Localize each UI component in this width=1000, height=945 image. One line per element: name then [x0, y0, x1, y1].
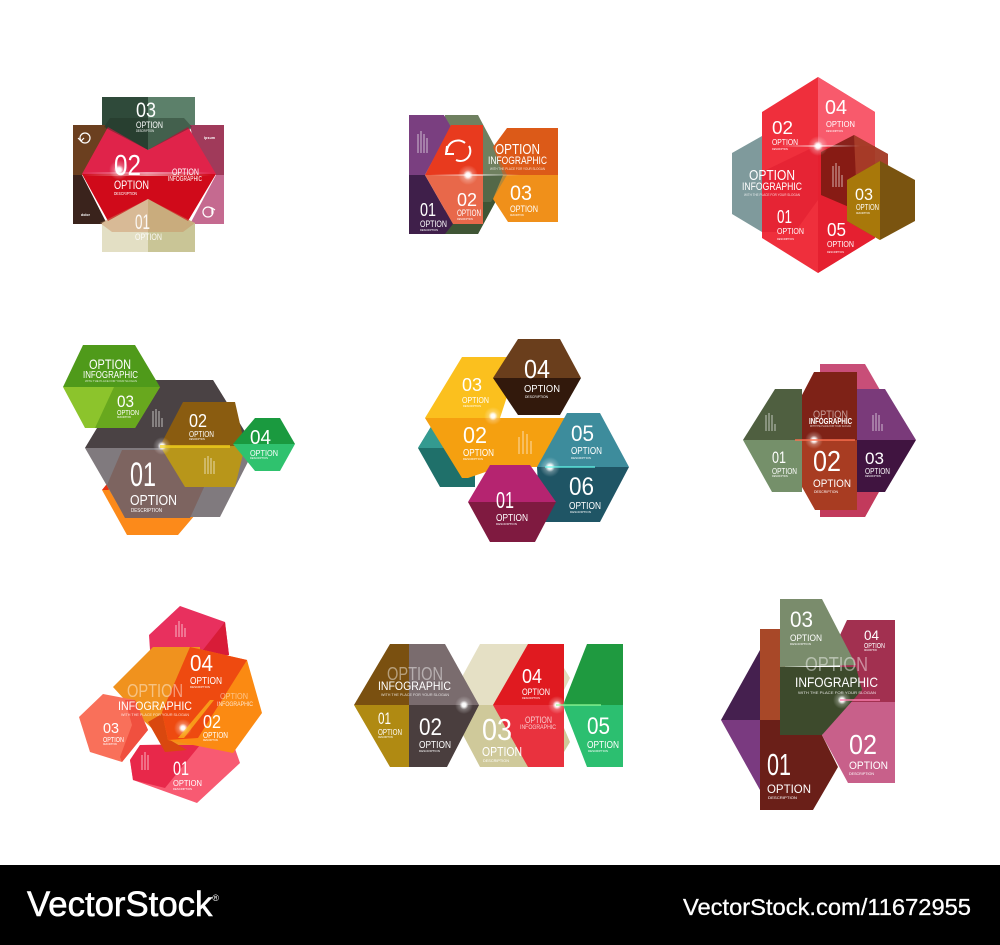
- option 03: [136, 99, 163, 133]
- option 01: OPTION: [772, 467, 797, 476]
- panel: infographic 9: [721, 599, 895, 810]
- option 03: [482, 712, 522, 763]
- option 02: DESCRIPTION: [463, 457, 483, 461]
- glow: [808, 136, 828, 156]
- option 04: DESCRIPTION: [525, 395, 548, 399]
- option 04: 04: [522, 666, 542, 688]
- option infographic small: [520, 715, 556, 731]
- labels: Ipsum: [204, 136, 215, 140]
- option 03: DESCRIPTION: [483, 759, 510, 763]
- option 04: OPTION: [826, 119, 855, 129]
- option 01: OPTION: [378, 728, 402, 737]
- option 02: 02: [813, 446, 841, 478]
- option 01: OPTION: [173, 778, 202, 788]
- option 03: [790, 607, 822, 646]
- option 04: [190, 650, 222, 689]
- option 04: DESCRIPTION: [250, 456, 268, 460]
- image url: VectorStock.com/11672955: [683, 894, 971, 920]
- option infographic: [168, 167, 202, 183]
- option 03: 03: [855, 185, 873, 204]
- option 04: 04: [864, 627, 879, 643]
- bars icons: [766, 413, 882, 431]
- option 06: 06: [569, 473, 594, 501]
- option infographic: WITH THE PLACE FOR YOUR SLOGAN: [490, 167, 545, 171]
- option 02: [114, 150, 149, 196]
- option 02: [463, 422, 494, 461]
- option 01: DESCRIPTION: [772, 475, 788, 478]
- option 02: OPTION: [419, 740, 451, 751]
- option infographic small: [217, 692, 253, 708]
- option 03: OPTION: [117, 408, 139, 417]
- option 04: OPTION: [522, 687, 550, 697]
- panel: infographic 1: [73, 97, 224, 252]
- option infographic small: INFOGRAPHIC: [217, 701, 253, 708]
- option 03: 03: [117, 392, 134, 411]
- option infographic: INFOGRAPHIC: [795, 674, 878, 690]
- bars icons: [153, 409, 214, 474]
- option 05: [571, 421, 602, 460]
- option 02: DESCRIPTION: [114, 191, 137, 196]
- option 02: OPTION: [463, 448, 494, 459]
- option 04: OPTION: [864, 643, 885, 650]
- option 02: 02: [419, 714, 442, 741]
- option 02: 02: [114, 150, 141, 182]
- option 02: OPTION: [813, 478, 851, 490]
- glow: [458, 165, 478, 185]
- option 04: [524, 354, 560, 399]
- option 02: [813, 446, 851, 494]
- brand name: ®: [212, 893, 219, 903]
- option 01: DESCRIPTION: [496, 522, 517, 526]
- option infographic: WITH THE PLACE FOR YOUR SLOGAN: [381, 693, 449, 697]
- option 03: OPTION: [103, 737, 124, 744]
- option 03: [117, 392, 139, 419]
- option 03: 03: [790, 607, 813, 632]
- option infographic small: INFOGRAPHIC: [520, 724, 556, 731]
- option 06: OPTION: [569, 501, 601, 512]
- glow: [174, 719, 192, 737]
- option infographic: WITH THE PLACE FOR YOUR SLOGAN: [85, 379, 137, 383]
- option 03: 03: [510, 182, 532, 205]
- option 01: 01: [173, 759, 189, 780]
- glows: [484, 407, 502, 425]
- option 03: DESCRIPTION: [790, 642, 811, 646]
- panel: infographic 6: [743, 364, 916, 517]
- option 01: 01: [772, 448, 786, 467]
- bars icons: [142, 621, 185, 770]
- option 02: OPTION: [203, 731, 228, 740]
- option 01: [135, 211, 162, 242]
- icon: refresh: [446, 140, 470, 161]
- option 05: OPTION: [571, 446, 602, 457]
- panel: infographic 3: [732, 77, 915, 273]
- option 03: [462, 375, 489, 408]
- icon: refresh right: [203, 207, 215, 217]
- option 03: DESCRIPTION: [136, 129, 154, 133]
- option infographic: OPTION: [89, 356, 131, 372]
- option 02: [772, 118, 798, 151]
- option 02: 02: [189, 411, 207, 431]
- option 01: [772, 448, 797, 478]
- option 05: 05: [587, 713, 610, 740]
- option 03: DESCRIPTION: [856, 211, 870, 215]
- option 01: OPTION: [135, 232, 162, 242]
- option 02: DESCRIPTION: [849, 772, 874, 776]
- option 04: 04: [190, 650, 213, 676]
- brand name: VectorStock: [27, 885, 214, 924]
- option infographic: INFOGRAPHIC: [378, 679, 451, 693]
- option 04: [864, 627, 885, 652]
- option 01: DESCRIPTION: [131, 508, 162, 514]
- option 01: OPTION: [496, 513, 528, 524]
- option 04: OPTION: [190, 676, 222, 687]
- option 05: DESCRIPTION: [588, 749, 608, 753]
- glow: [109, 160, 129, 180]
- option infographic large: OPTION: [127, 681, 183, 701]
- icon: refresh left: [78, 133, 90, 143]
- option 04: OPTION: [524, 384, 560, 395]
- option infographic: OPTION: [749, 167, 795, 184]
- option 03: 03: [865, 449, 884, 468]
- option 04: OPTION: [250, 449, 278, 458]
- option 02: 02: [849, 729, 877, 760]
- labels: [81, 136, 215, 217]
- option infographic: OPTION: [387, 664, 443, 684]
- option 04: DESCRIPTION: [826, 129, 843, 133]
- option 03: 03: [136, 99, 156, 122]
- option infographic: [742, 167, 802, 197]
- option 06: [569, 473, 601, 514]
- option 04: [825, 97, 855, 133]
- option 03: OPTION: [136, 120, 163, 130]
- option 01: 01: [378, 709, 391, 728]
- option infographic: OPTION: [172, 167, 199, 177]
- option 02: 02: [463, 422, 487, 448]
- option 01: 01: [130, 456, 156, 494]
- option 03: DESCRIPTION: [103, 743, 117, 746]
- panel: infographic 2: [409, 115, 558, 234]
- option 03: OPTION: [462, 395, 489, 405]
- option infographic: [378, 664, 451, 697]
- option 01: [767, 747, 811, 800]
- option 01: OPTION: [767, 782, 811, 796]
- option 01: [420, 200, 447, 232]
- option infographic: WITH THE PLACE FOR YOUR SLOGAN: [744, 193, 800, 197]
- glow: [805, 431, 823, 449]
- option 05: OPTION: [827, 239, 854, 249]
- glow: [833, 691, 851, 709]
- glows: [455, 696, 473, 714]
- footer band: [0, 865, 1000, 945]
- option 05: OPTION: [587, 740, 619, 751]
- option 05: DESCRIPTION: [827, 250, 844, 254]
- option infographic: WITH THE PLACE FOR YOUR SLOGAN: [810, 425, 851, 428]
- option 02: OPTION: [457, 208, 481, 218]
- option infographic large: WITH THE PLACE FOR YOUR SLOGAN: [121, 713, 189, 717]
- option 01: 01: [496, 487, 514, 513]
- option infographic: WITH THE PLACE FOR YOUR SLOGAN: [798, 690, 876, 695]
- option 02: OPTION: [189, 430, 214, 439]
- option 03: DESCRIPTION: [865, 475, 881, 478]
- option infographic: INFOGRAPHIC: [83, 370, 138, 381]
- option infographic large: [118, 681, 192, 717]
- option 02: [189, 411, 214, 441]
- option 02: DESCRIPTION: [772, 147, 788, 151]
- option 02: OPTION: [849, 760, 888, 772]
- option 02: [849, 729, 888, 776]
- option 01: [777, 207, 804, 241]
- option infographic: [488, 141, 547, 171]
- option 03: 03: [482, 712, 512, 747]
- option infographic: INFOGRAPHIC: [168, 176, 202, 183]
- option 05: 05: [827, 220, 846, 240]
- option infographic: [795, 654, 878, 695]
- bars icon: [519, 431, 531, 454]
- panel: infographic 4: [63, 345, 295, 535]
- option 02: DESCRIPTION: [419, 749, 440, 753]
- option 01: 01: [420, 200, 436, 220]
- option 01: DESCRIPTION: [420, 228, 438, 232]
- option 02: 02: [457, 190, 477, 210]
- option 03: OPTION: [482, 744, 522, 759]
- option 02: [203, 712, 228, 742]
- option 02: [419, 714, 451, 753]
- option infographic: [83, 356, 138, 383]
- option 03: OPTION: [856, 203, 879, 212]
- option infographic: INFOGRAPHIC: [809, 417, 852, 426]
- option 01: 01: [777, 207, 792, 227]
- panel: infographic 8: [354, 644, 623, 767]
- option infographic: INFOGRAPHIC: [742, 181, 802, 193]
- option infographic large: INFOGRAPHIC: [118, 699, 192, 713]
- option infographic: OPTION: [805, 654, 868, 676]
- option 05: [587, 713, 619, 753]
- option 01: DESCRIPTION: [777, 237, 794, 241]
- option 04: [522, 666, 550, 700]
- option 03: [855, 185, 879, 215]
- option 01: DESCRIPTION: [173, 788, 192, 791]
- option 03: OPTION: [865, 467, 890, 476]
- option 06: DESCRIPTION: [570, 510, 591, 514]
- option 02: 02: [772, 118, 793, 138]
- bars icon: [418, 131, 427, 153]
- option infographic: OPTION: [813, 409, 848, 421]
- option 03: 03: [462, 375, 482, 395]
- option infographic small: OPTION: [220, 692, 248, 701]
- option 03: [510, 182, 538, 217]
- option 02: DESCRIPTION: [203, 739, 218, 742]
- option 01: OPTION: [420, 219, 447, 229]
- option 02: DESCRIPTION: [189, 437, 205, 441]
- option 05: [827, 220, 854, 254]
- option infographic small: OPTION: [525, 715, 552, 725]
- option 03: [865, 449, 890, 478]
- bars icon: [833, 163, 842, 187]
- option infographic: INFOGRAPHIC: [488, 155, 547, 167]
- option 01: [378, 709, 402, 739]
- option 02: DESCRIPTION: [457, 217, 473, 221]
- option 01: [173, 759, 202, 791]
- option 04: DESCRIPTION: [864, 649, 877, 652]
- option 03: OPTION: [790, 633, 822, 643]
- panel: infographic 7: [79, 606, 262, 803]
- option 02: 02: [203, 712, 221, 732]
- option 01: DESCRIPTION: [768, 796, 798, 800]
- option 01: [496, 487, 528, 526]
- option 02: OPTION: [114, 178, 149, 192]
- option 05: DESCRIPTION: [571, 456, 591, 460]
- labels: dolor: [81, 213, 91, 217]
- option 02: DESCRIPTION: [814, 490, 838, 494]
- option 01: [130, 456, 177, 514]
- option 01: 01: [135, 211, 150, 234]
- option 04: 04: [524, 354, 550, 384]
- glow: [153, 437, 171, 455]
- option 01: 01: [767, 747, 791, 782]
- option infographic: OPTION: [495, 141, 540, 158]
- option 02: OPTION: [772, 137, 798, 147]
- option 04: DESCRIPTION: [190, 686, 210, 689]
- option 03: DESCRIPTION: [463, 404, 481, 408]
- option 01: OPTION: [130, 492, 177, 509]
- option 04: [250, 427, 278, 460]
- option 04: 04: [825, 97, 847, 119]
- option 04: 04: [250, 427, 271, 449]
- option 03: 03: [103, 720, 119, 737]
- option 05: 05: [571, 421, 594, 446]
- option 02: [457, 190, 481, 221]
- option 03: DESCRIPTION: [510, 213, 524, 217]
- option 03: OPTION: [510, 204, 538, 214]
- option 03: DESCRIPTION: [117, 416, 131, 419]
- option 01: DESCRIPTION: [378, 736, 393, 739]
- option 04: DESCRIPTION: [522, 696, 540, 700]
- panel: infographic 5: [418, 339, 629, 542]
- option 03: [103, 720, 124, 746]
- option infographic: [809, 409, 852, 428]
- option 01: OPTION: [777, 226, 804, 236]
